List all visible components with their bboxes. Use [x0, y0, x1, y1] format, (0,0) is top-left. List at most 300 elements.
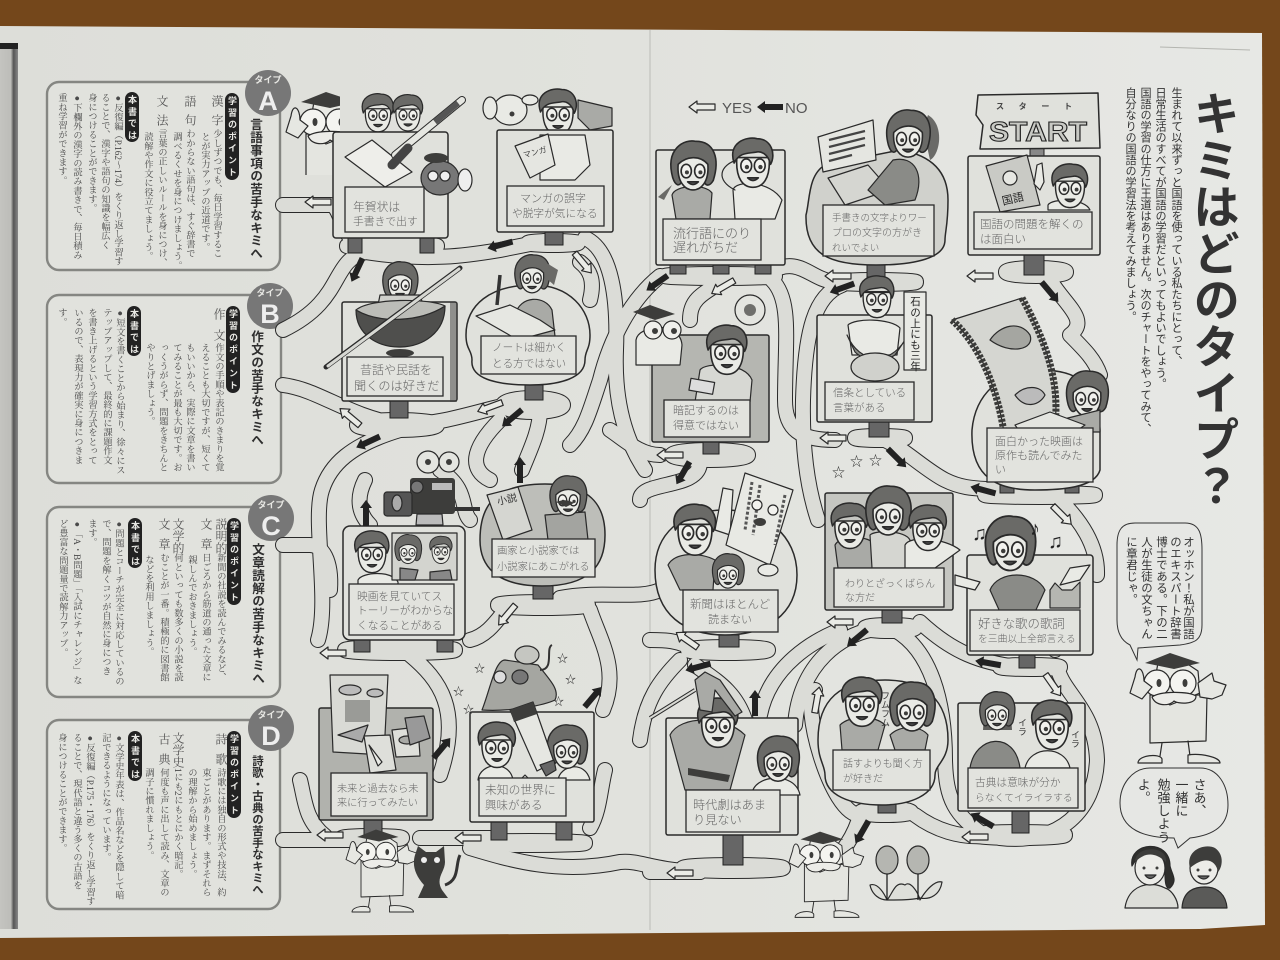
arrow: yes: [1041, 671, 1065, 699]
label plate: 得意ではない: [673, 419, 739, 432]
two boys: [362, 94, 423, 132]
arrow: yes: [827, 616, 853, 628]
novelist: [545, 476, 588, 540]
arrow: no: [643, 271, 671, 295]
stars: [832, 453, 882, 480]
text block D: 古: [157, 732, 171, 745]
novel book: 小説: [496, 491, 518, 508]
label plate: 手書きで出す: [353, 215, 418, 228]
text block A: わからない語句は、すぐ辞書で: [185, 129, 196, 258]
label plate: [347, 357, 443, 396]
badge A: [245, 70, 291, 116]
kokugo book: 国語: [1001, 190, 1025, 208]
book notes B: す。: [57, 308, 68, 326]
stars: ☆: [869, 453, 882, 468]
girl reading: [1055, 371, 1108, 432]
label plate: [834, 568, 944, 607]
arrow: yes: [494, 601, 520, 629]
text block B: えることも大切ですが、短くて: [200, 343, 211, 472]
character: aki-kun: [1182, 846, 1227, 908]
arrow: yes: [570, 249, 596, 277]
text block A: 語: [183, 95, 197, 107]
boy watching: [355, 531, 398, 586]
book notes A: ●反復編（P.162～174）をくり返し学習す: [113, 93, 124, 266]
label plate: [492, 539, 595, 577]
sign: novelist: [480, 476, 605, 599]
irritated man: [1025, 700, 1072, 768]
text block C: 章: [157, 537, 171, 550]
text block A: 法: [155, 113, 169, 127]
newspaper character: [726, 473, 793, 576]
label plate: [833, 750, 930, 790]
text block A: 漢: [210, 95, 224, 107]
irritation marks: イラ: [1070, 730, 1080, 748]
label plate: [970, 610, 1080, 651]
arrow: no: [514, 457, 526, 483]
speech bubble: doctor: [1117, 523, 1202, 660]
intro text: 国語の学習の仕方に王道はありません。次のチャートをやってみて、: [1139, 87, 1152, 434]
text block A: 文: [155, 94, 169, 107]
book notes D: ●文学史年表は、作品名などを隠して暗: [114, 733, 125, 900]
boy's body: [540, 135, 590, 180]
text block B: 作: [212, 308, 226, 320]
stars: ☆: [565, 673, 576, 686]
arrow: no: [1037, 278, 1063, 306]
label plate: 読まない: [708, 613, 752, 626]
arrow: no: [354, 431, 382, 453]
arrow: no: [429, 734, 455, 762]
label plate: 古典は意味が分か: [975, 776, 1061, 789]
text block B: [145, 308, 226, 473]
needle oar: [326, 268, 460, 367]
label plate: 信条としている: [833, 386, 906, 399]
arrow: yes: [476, 397, 504, 417]
arrow: yes: [320, 647, 346, 659]
speech bubble: students: [1120, 768, 1228, 848]
badge B: [247, 283, 293, 329]
book pill D: [128, 731, 142, 782]
text block D: 束ごとがあります。まずそれら: [201, 767, 212, 898]
badge C: C: [261, 511, 281, 541]
label plate: [663, 219, 761, 260]
couple talking: [840, 677, 935, 750]
label plate: [987, 428, 1093, 482]
label plate: 話すよりも聞く方: [843, 758, 923, 770]
open notebook: [476, 305, 555, 340]
brush: [392, 100, 462, 165]
text block B: 文: [212, 328, 226, 341]
arrow: yes: [317, 829, 343, 841]
sign: memorising: [633, 295, 769, 454]
arrow: no: [486, 236, 514, 254]
book pill B: [127, 306, 141, 357]
label plate: 時代劇はあま: [693, 798, 766, 812]
whisper text: フムフム: [880, 691, 890, 727]
open novel: [1015, 412, 1085, 432]
girl writing: [513, 255, 558, 345]
girl: [547, 725, 590, 780]
arrow: yes: [967, 270, 993, 282]
book notes D: ることで、現代語と違う多くの古語を: [72, 733, 83, 889]
text block C: 文: [199, 517, 213, 530]
bowl: [356, 300, 445, 357]
panel: type A: [47, 70, 291, 270]
ufo robot: [482, 645, 556, 710]
keyboard: [828, 165, 890, 205]
panel: type B: [47, 283, 293, 483]
heading A: 言語事項の苦手なキミへ: [248, 118, 262, 260]
badge D: D: [261, 721, 281, 751]
arrow: no: [749, 690, 761, 716]
stars: ☆: [474, 662, 485, 675]
sign: film and novel: [952, 298, 1108, 493]
label plate: な方だ: [845, 592, 875, 604]
sign: good listener: [818, 677, 948, 813]
small girl: [712, 554, 744, 588]
text block A: [143, 94, 224, 270]
text block C: 日ごろから筋道の通った文章に: [201, 553, 212, 682]
boy: [478, 722, 515, 780]
speech bubble: doctor: オッホン！私が国語: [1182, 536, 1195, 640]
binding strip at left edge: [0, 43, 18, 929]
singing woman: [955, 516, 1090, 612]
sign: unknown world: [453, 645, 594, 840]
legend: yes and no arrows: NO: [785, 100, 808, 117]
panel: type C: [47, 495, 294, 697]
sign: period drama: [650, 672, 800, 865]
text block C: 新聞の社説を読んでみるなど、: [216, 552, 227, 682]
book pill D: 本書では: [130, 733, 140, 782]
stars: ☆: [832, 465, 845, 480]
motto vertical sign: 石の上にも三年: [909, 296, 921, 372]
label plate: い: [995, 464, 1006, 476]
rocket poster: [392, 727, 420, 757]
intro text: 日常生活のすべてが国語の学習だといってもよいでしょう。: [1154, 87, 1167, 389]
label plate: マンガの誤字: [520, 192, 586, 205]
speech bubble: doctor: 人が生徒の文ちゃん: [1140, 536, 1153, 640]
label plate: [507, 186, 604, 226]
arrow: yes: [809, 686, 825, 714]
manga book: [515, 134, 555, 178]
book notes C: で、問題を解くコツが自然に身につき: [101, 519, 112, 675]
text block D: 何度も声に出して読み、文章の: [159, 767, 170, 897]
label plate: [349, 584, 454, 635]
stars: ☆: [850, 454, 863, 469]
scared girl: [752, 736, 800, 795]
stars: [453, 652, 576, 716]
book notes A: ることで、漢字や語句の知識を幅広く: [100, 93, 111, 249]
music notes: ♪: [1030, 518, 1040, 540]
heading D: 詩歌・古典の苦手なキミへ: [251, 754, 264, 895]
text block D: 1にも2にもとにかく暗記。: [173, 768, 184, 878]
text block C: などを利用しましょう。: [144, 555, 155, 656]
music notes: ♫: [1048, 531, 1063, 553]
arrow: no: [580, 683, 606, 711]
label plate: とる方ではない: [492, 358, 566, 370]
arrow: no: [968, 808, 996, 832]
label plate: [683, 590, 778, 632]
computer monitor: [818, 120, 876, 172]
badge C: タイプ: [257, 499, 285, 510]
label plate: [345, 187, 424, 232]
stars: ☆: [463, 703, 474, 716]
book notes D: 身につけることができます。: [57, 732, 68, 853]
arrow: no: [828, 278, 856, 298]
book notes A: 重ね学習ができます。: [57, 92, 68, 185]
badge C: [248, 495, 294, 541]
book notes C: ●問題とコーチが完全に対応しているの: [114, 519, 125, 685]
stars: ☆: [553, 695, 564, 708]
character: doctor at bottom centre: [789, 832, 864, 917]
start sign: スタート: [996, 101, 1072, 111]
arrow: no: [498, 405, 526, 431]
label plate: り見ない: [693, 813, 742, 827]
arrow: yes: [657, 449, 683, 461]
text block C: 文学的: [171, 517, 185, 554]
label plate: 未知の世界に: [485, 783, 556, 797]
learning point pill D: 学習のポイント: [229, 733, 239, 817]
label plate: 年賀状は: [353, 200, 400, 214]
stacked books: [578, 100, 612, 130]
book notes B: テップアップして、最終的に課題作文: [102, 308, 113, 465]
doctor peeking: [285, 92, 340, 175]
book notes A: [57, 92, 124, 266]
text block A: とが実力アップの近道です。: [200, 132, 211, 252]
man: [668, 488, 733, 590]
label plate: 流行語にのり: [673, 226, 751, 241]
sign: frank personality: [825, 453, 960, 623]
speech bubble: students: さあ、: [1192, 778, 1206, 817]
arrow: no: [843, 625, 871, 651]
text block C: 章: [199, 537, 213, 550]
label plate: 来に行ってみたい: [337, 796, 418, 809]
book pill A: [125, 92, 139, 143]
text block B: っくうがらず、問題をきちんと: [158, 343, 169, 472]
label plate: 暗記するのは: [673, 404, 739, 417]
dog: [483, 95, 538, 125]
book notes B: [57, 308, 126, 474]
typing woman: [868, 110, 939, 205]
shuttle poster: [364, 735, 396, 773]
arrow: yes: [305, 196, 331, 208]
book pill C: 本書では: [130, 520, 140, 569]
label plate: 遅れがちだ: [673, 240, 738, 255]
arrow: no: [969, 481, 997, 499]
text block B: やりとげましょう。: [145, 343, 156, 426]
sign: manga: [483, 89, 613, 245]
label plate: 聞くのは好きだ: [354, 379, 439, 393]
character: tulips: [870, 846, 942, 900]
label plate: 昔話や民話を: [360, 363, 432, 377]
text block C: むことが一番。積極的に図書館: [159, 553, 170, 683]
katana: [650, 690, 695, 718]
film strip: [952, 298, 1056, 440]
label plate: [331, 773, 427, 816]
book notes C: [58, 519, 125, 685]
learning point pill C: 学習のポイント: [229, 520, 239, 604]
samurai: [670, 672, 745, 790]
speech bubble: doctor: のエキスパート辞書: [1169, 536, 1182, 640]
text block A: 字: [210, 113, 224, 126]
boy: [539, 89, 576, 134]
intro text: 自分なりの国語の学習法を考えてみましょう。: [1124, 87, 1137, 322]
book notes A: ●下欄外の漢字の読み書きで、毎日積み: [72, 93, 83, 259]
text block C: 親しんでおきましょう。: [187, 554, 198, 656]
label plate: や脱字が気になる: [512, 207, 598, 220]
text block B: てみることが最も大切です。お: [172, 343, 183, 472]
music notes: ♫: [972, 523, 987, 545]
telescope: [510, 702, 556, 780]
learning point pill C: [227, 518, 241, 605]
label plate: [968, 768, 1078, 808]
text block D: 詩歌には独自の形式や技法、約: [216, 767, 227, 898]
character: black cat: [414, 846, 460, 898]
text block D: 典: [157, 752, 171, 766]
ink pot mascot: [421, 153, 472, 195]
sign: movie story: [343, 526, 465, 652]
label plate: は面白い: [980, 233, 1026, 246]
label plate: 国語の問題を解くの: [980, 218, 1084, 231]
book pill B: 本書では: [129, 308, 139, 357]
learning point pill B: 学習のポイント: [228, 308, 238, 392]
main title: キミはどのタイプ？: [1187, 90, 1239, 508]
label plate: 手書きの文字よりワー: [832, 212, 927, 224]
book notes C: ど豊富な問題量で読解力アップ。: [58, 519, 69, 657]
irritation marks: [1017, 718, 1080, 748]
sign: motto: [817, 276, 932, 437]
text block A: 読解や作文に役立てましょう。: [143, 131, 154, 261]
arrow: no: [684, 658, 712, 676]
sign: song lyrics: [955, 516, 1093, 668]
worried man: [689, 325, 752, 402]
character: movie camera and owl: [384, 451, 480, 525]
label plate: 画家と小説家では: [497, 544, 579, 557]
label plate: 言葉がある: [833, 402, 886, 414]
irritation marks: イラ: [1017, 718, 1027, 736]
girl with braid: [658, 141, 716, 219]
label plate: が好きだ: [843, 773, 883, 785]
label plate: [479, 778, 566, 816]
sign: word processor: [806, 110, 948, 277]
text block D: 詩: [214, 732, 228, 746]
book pill C: [128, 518, 142, 569]
text block C: [144, 517, 228, 683]
arrow: yes: [825, 270, 851, 282]
badge D: [248, 705, 294, 751]
boy scratching head: [722, 138, 782, 219]
arrow: yes: [962, 831, 988, 843]
court lady: [970, 692, 1020, 768]
sign: folk tales: [326, 262, 460, 418]
text block A: 言葉の正しいルールを身につけ、: [157, 129, 168, 267]
book notes C: ●「A・B問題」「入試にチャレンジ」な: [72, 519, 83, 684]
label plate: 小説家にあこがれる: [497, 560, 590, 573]
arrow: yes: [455, 832, 481, 844]
owl doctor peeking: [633, 305, 682, 365]
heading B: 作文の苦手なキミへ: [249, 330, 263, 446]
book notes D: [57, 732, 125, 906]
arrow: yes: [709, 275, 737, 299]
book notes C: ます。: [87, 519, 98, 547]
arrow: yes: [820, 432, 846, 444]
label plate: くなることがある: [357, 620, 443, 632]
label plate: れいでよい: [832, 243, 879, 254]
speech bubble: doctor: に章君じゃ。: [1125, 536, 1138, 605]
sign: newspaper: [655, 473, 797, 647]
intro text: 生まれて以来ずっと国語を使っている私たちにとって、: [1170, 86, 1183, 367]
speech bubble: students: 勉強しよう: [1156, 778, 1170, 844]
character: language doctor: [1130, 653, 1226, 763]
label plate: [974, 212, 1092, 249]
text block D: 歌: [214, 753, 228, 765]
label plate: 未来と過去なら未: [337, 783, 418, 795]
book notes D: ●反復編（P.175・176）をくり返し学習す: [85, 733, 96, 906]
book notes B: いるので、表現力が確実に身につきま: [73, 308, 84, 464]
text block B: もいいから、実際に文章を書い: [185, 343, 196, 472]
sign: slang: [656, 138, 785, 274]
label plate: プロの文字の方がき: [832, 227, 922, 239]
label plate: [481, 336, 576, 374]
heading C: 文章読解の苦手なキミへ: [250, 542, 264, 685]
character: fumi-chan: [1125, 846, 1178, 908]
label plate: らなくてイライラする: [975, 792, 1073, 804]
badge B: B: [260, 299, 280, 329]
sign: future: [319, 675, 433, 836]
arrow: no: [671, 459, 695, 487]
pencil: [497, 275, 500, 305]
three friends: [831, 486, 960, 568]
start sign: START: [989, 116, 1087, 147]
text block D: 文学史: [171, 731, 185, 768]
label plate: [823, 205, 934, 256]
label plate: [825, 382, 914, 420]
sign: notebook: [466, 255, 590, 400]
arrow: yes: [1049, 502, 1075, 528]
label plate: 面白かった映画は: [995, 435, 1083, 448]
legend: yes and no arrows: [689, 100, 808, 117]
flowchart roads: [283, 205, 1100, 872]
badge A: タイプ: [254, 74, 282, 85]
text block B: 作文の手順や表記のきまりを覚: [214, 342, 225, 473]
label plate: ノートは細かく: [492, 341, 566, 354]
sign: nengajo: [286, 92, 472, 253]
intro text: [1124, 86, 1183, 434]
arrows: yes and no direction markers: [305, 196, 1075, 879]
music notes: [972, 518, 1063, 553]
arrow: no: [346, 256, 368, 284]
panel: type D: [47, 705, 294, 909]
book notes A: 身につけることができます。: [87, 92, 98, 213]
issun-boshi: [383, 262, 418, 300]
motto vertical sign: [904, 292, 926, 372]
text block A: 句: [183, 113, 197, 126]
label plate: 映画を見ていてス: [357, 591, 442, 603]
text block C: 文: [157, 517, 171, 530]
arrow: yes: [667, 867, 693, 879]
badge D: タイプ: [257, 709, 285, 720]
cat: [1050, 582, 1080, 608]
text block D: 調子に慣れましょう。: [144, 768, 155, 860]
sign: classics: [958, 692, 1085, 833]
arrow: no: [974, 655, 1002, 671]
boy with thumb up: [1034, 163, 1090, 210]
badge B: タイプ: [256, 287, 284, 298]
book pill A: 本書では: [127, 94, 137, 143]
book notes D: 記できるようになっています。: [101, 733, 112, 862]
text block D: の理解から始めましょう。: [187, 768, 198, 878]
legend: yes and no arrows: YES: [722, 100, 752, 117]
label plate: わりとざっくばらん: [845, 577, 935, 590]
